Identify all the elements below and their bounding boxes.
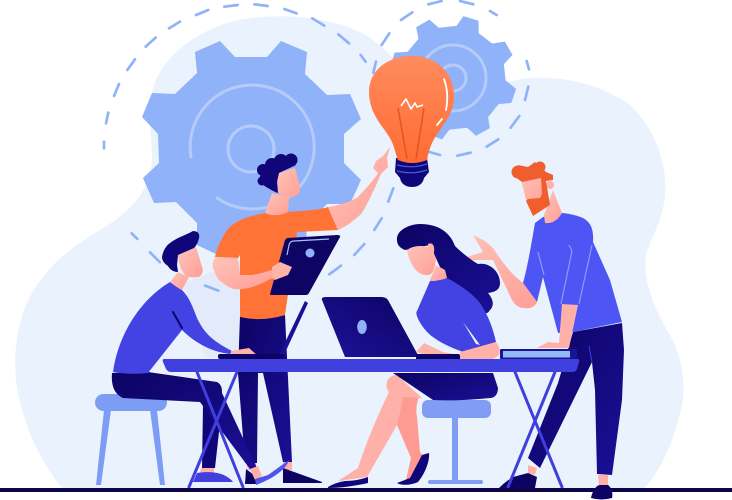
soft shade under the large gear <box>183 262 240 357</box>
face <box>521 174 546 203</box>
shoes <box>328 477 368 488</box>
large gear <box>142 41 361 256</box>
legs <box>238 315 292 463</box>
arm reaching <box>457 235 537 308</box>
standing man in orange <box>213 147 390 484</box>
light bulb <box>369 56 454 187</box>
ear <box>546 181 554 189</box>
sleeve lines <box>538 245 592 304</box>
ankles <box>528 465 608 486</box>
book on table <box>500 349 577 359</box>
floor line <box>0 488 732 492</box>
hair and beard <box>512 162 553 216</box>
forearm holding tablet <box>213 257 272 289</box>
hand on keyboard <box>231 348 258 356</box>
arm <box>460 342 500 359</box>
hand on keyboard <box>416 343 458 360</box>
hand <box>272 262 292 280</box>
small gear rings <box>420 45 486 111</box>
tablet highlight <box>287 239 329 255</box>
face <box>178 247 203 277</box>
blue shoe <box>193 472 233 482</box>
man with beard <box>457 162 624 488</box>
stool: left <box>95 394 167 485</box>
legs <box>189 372 562 487</box>
table <box>163 359 579 487</box>
laptop: woman <box>322 297 460 360</box>
shirt <box>523 213 622 333</box>
ankles <box>246 462 292 470</box>
glass <box>369 56 454 163</box>
top <box>163 359 579 372</box>
front shoe <box>255 460 289 485</box>
pants <box>528 323 624 475</box>
shoes <box>245 468 322 484</box>
ankle <box>200 468 214 474</box>
neck <box>544 190 562 223</box>
near arm <box>537 304 578 348</box>
front leg <box>338 375 422 481</box>
glass highlights <box>437 79 447 125</box>
man shoe over floor line <box>591 485 612 500</box>
shirt <box>215 207 338 319</box>
hair <box>257 154 298 193</box>
screen <box>322 297 419 357</box>
face <box>277 168 300 197</box>
stool: right <box>422 400 491 484</box>
tablet <box>270 235 340 295</box>
sweater <box>113 282 232 374</box>
hair <box>162 231 199 272</box>
woman <box>328 224 500 488</box>
face <box>407 246 436 275</box>
bulb screw base <box>395 158 429 187</box>
neck <box>430 265 447 281</box>
small gear <box>386 11 521 144</box>
skirt <box>393 373 498 400</box>
filament spark <box>401 99 423 109</box>
logo <box>357 320 367 334</box>
seated man in blue <box>112 231 289 485</box>
ear <box>428 243 434 262</box>
dashed orbit: small gear <box>373 1 529 156</box>
neck <box>265 193 289 215</box>
pants crease <box>589 346 592 362</box>
large gear rings <box>190 85 314 209</box>
neck <box>170 272 189 290</box>
top <box>416 278 496 352</box>
keyboard base <box>416 354 460 359</box>
hair <box>397 224 500 314</box>
elbow crease <box>173 312 182 328</box>
tablet camera <box>306 248 314 258</box>
back leg <box>397 396 423 483</box>
filament stems <box>398 108 424 159</box>
front ankle <box>250 466 262 480</box>
raised arm <box>328 147 390 230</box>
front leg <box>112 372 257 469</box>
top crease <box>463 322 480 345</box>
left shoe <box>499 473 537 488</box>
laptop: seated man <box>218 301 308 359</box>
back leg <box>202 405 222 468</box>
dashed orbit: large gear <box>104 4 393 291</box>
